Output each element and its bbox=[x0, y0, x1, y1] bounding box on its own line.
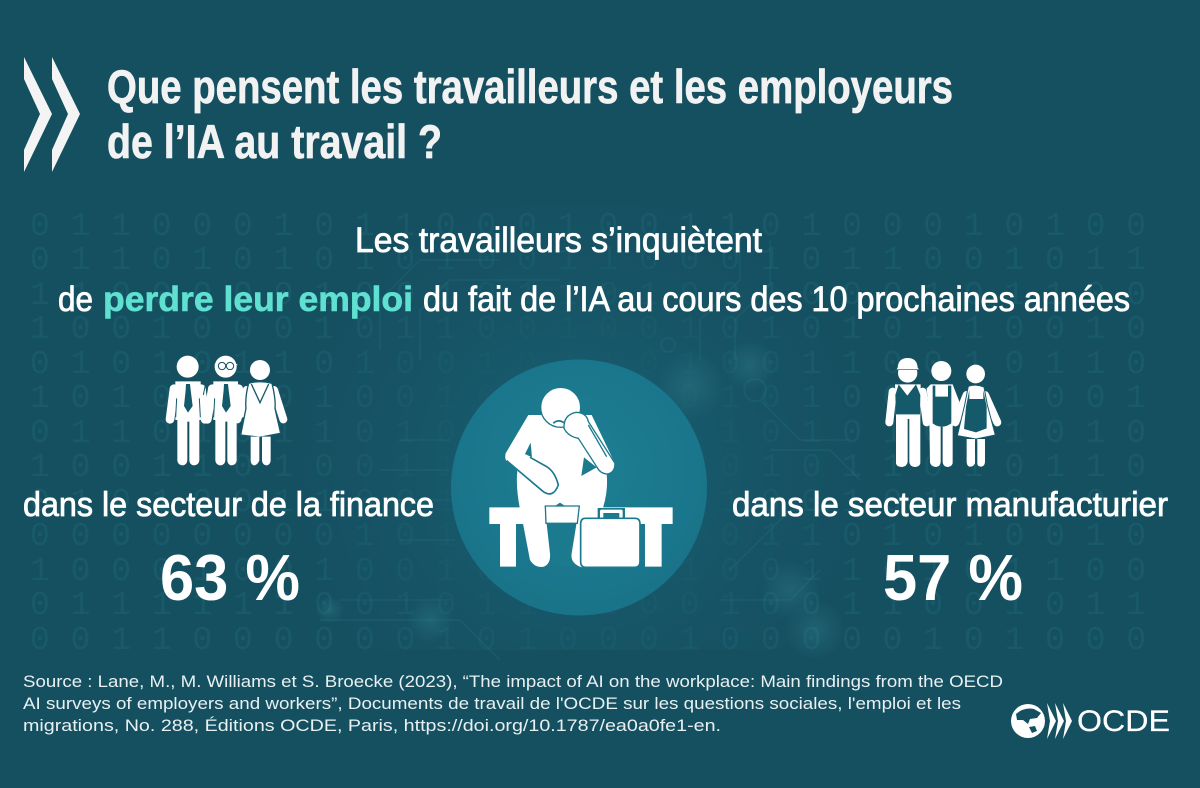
binary code pattern bbox=[0, 205, 1200, 659]
text: source: AI surveys of employers and workers”, Documents de travail de l'OCDE sur les questions sociales, l'emploi et les bbox=[23, 694, 961, 713]
binary code pattern: 1001101001101101001011010110 bbox=[30, 449, 1167, 486]
icon: OECD chevrons bbox=[24, 57, 80, 172]
text: finance sector label: dans le secteur de la finance bbox=[23, 486, 434, 524]
text: source: Source : Lane, M., M. Williams et S. Broecke (2023), “The impact of AI on the workplace: Main findings from the OECD bbox=[23, 672, 1003, 691]
binary code pattern: 1010110100101001010100101001 bbox=[30, 380, 1167, 417]
binary code pattern: 1100000100101101001000101100 bbox=[30, 277, 1167, 314]
background glows bbox=[316, 339, 845, 660]
icon: worried person on bench with briefcase bbox=[489, 387, 673, 567]
logo: OCDE bbox=[1011, 703, 1170, 739]
binary code pattern: 0110001011000100110100010100 bbox=[30, 208, 1167, 245]
stat: 63 %: 63 % bbox=[160, 541, 300, 614]
heading: workers worry: perdre leur emploi bbox=[103, 280, 413, 319]
binary code pattern: 0101001100100101010010100101 bbox=[30, 484, 1167, 521]
panel: central circle bbox=[451, 360, 707, 616]
icon: manufacturing workers bbox=[889, 358, 997, 467]
binary code pattern: 0111111001011010010011001011 bbox=[30, 587, 1167, 624]
stat: 57 %: 57 % bbox=[883, 541, 1023, 614]
binary code pattern: 1001000101100100101010110010 bbox=[30, 311, 1167, 348]
text: source: migrations, No. 288, Éditions OCDE, Paris, https://doi.org/10.1787/ea0a0fe1-en. bbox=[23, 716, 721, 735]
heading: workers worry bbox=[58, 221, 1130, 319]
logo: OCDE: OCDE bbox=[1077, 705, 1170, 738]
text: manufacturing sector label: dans le secteur manufacturier bbox=[732, 486, 1168, 524]
binary code pattern: 0000000010100101001101010010 bbox=[30, 518, 1167, 555]
title bbox=[107, 60, 953, 168]
heading: workers worry: de bbox=[58, 280, 93, 319]
title: de l’IA au travail ? bbox=[107, 115, 442, 168]
title: Que pensent les travailleurs et les employeurs bbox=[107, 60, 953, 113]
heading: workers worry: du fait de l’IA au cours des 10 prochaines années bbox=[423, 280, 1130, 319]
binary code pattern: 0110101101010010110101011010 bbox=[30, 415, 1167, 452]
circuit board lines bbox=[320, 230, 860, 660]
binary code pattern: 0011000000101000100000101000 bbox=[30, 622, 1167, 659]
text: source bbox=[23, 672, 1003, 735]
icon: finance workers bbox=[170, 356, 283, 465]
binary code pattern: 0101011010010110100110010110 bbox=[30, 346, 1167, 383]
heading: workers worry: Les travailleurs s’inquiètent bbox=[355, 221, 762, 260]
binary code pattern: 1000100100101100100110101100 bbox=[30, 553, 1167, 590]
binary code pattern: 0110101010100110001011001011 bbox=[30, 242, 1167, 279]
